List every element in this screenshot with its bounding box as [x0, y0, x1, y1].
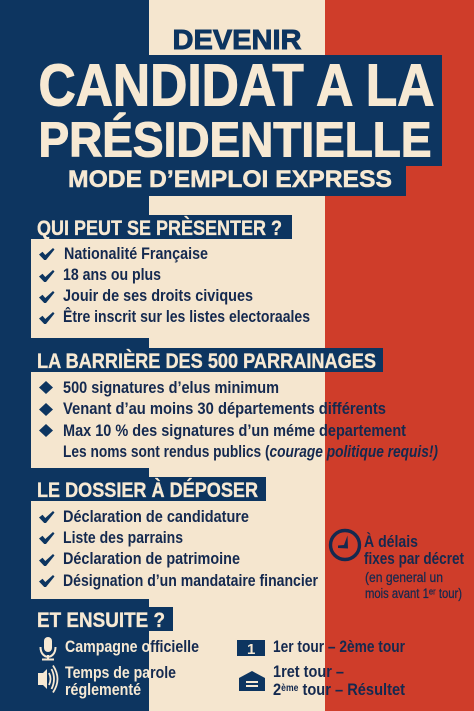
icon: microphone: [40, 637, 56, 660]
panel: le dossier à déposer: [31, 477, 318, 599]
callout: délais: À délais: [364, 532, 418, 551]
title banner: [149, 55, 442, 196]
callout: délais: [330, 530, 464, 601]
title block: [38, 24, 442, 196]
panel: le dossier à déposer: Déclaration de candidature: [63, 507, 249, 526]
icon: ballot box: [239, 671, 265, 691]
panel: barrière des 500 parrainages: Max 10 % des signatures d’un méme departement: [63, 421, 406, 440]
panel: barrière des 500 parrainages: Les noms sont rendus publics (courage politique requis!): [63, 442, 438, 461]
text: tours: 1er tour – 2ème tour: [273, 637, 405, 656]
heading bar: [31, 215, 292, 239]
panel: barrière des 500 parrainages: Venant d’au moins 30 départements différents: [63, 399, 386, 418]
panel: le dossier à déposer: Déclaration de patrimoine: [63, 549, 240, 568]
title: devenir: DEVENIR: [172, 24, 302, 55]
heading bar: [31, 607, 173, 631]
text: résultat: ème: [281, 683, 299, 694]
text: résultat: tour – Résultet: [298, 680, 405, 699]
text: résultat: [273, 662, 405, 699]
text: temps de parole: Temps de parole: [65, 663, 176, 682]
text: résultat: 1ret tour –: [273, 662, 344, 681]
heading: LE DOSSIER À DÉPOSER: [37, 479, 258, 502]
text: résultat: 2: [273, 680, 282, 699]
heading: LA BARRIÈRE DES 500 PARRAINAGES: [37, 350, 376, 373]
icon: speaker: [38, 666, 58, 692]
heading: ET ENSUITE ?: [37, 609, 165, 632]
heading bar: [31, 348, 383, 372]
panel: qui peut se présenter: [31, 215, 310, 338]
panel: qui peut se présenter: Nationalité Française: [64, 244, 208, 263]
list: [39, 381, 53, 437]
heading: QUI PEUT SE PRÈSENTER ?: [37, 217, 282, 240]
panel: qui peut se présenter: 18 ans ou plus: [63, 265, 161, 284]
heading bar: [31, 477, 266, 501]
panel: qui peut se présenter: Être inscrit sur les listes electoraales: [63, 307, 310, 326]
callout: délais: (en general un: [365, 570, 443, 585]
panel: qui peut se présenter: Jouir de ses droits civiques: [63, 286, 253, 305]
icon: tour 1 box: 1: [247, 641, 255, 658]
panel: barrière des 500 parrainages: [31, 348, 438, 468]
title: présidentielle: PRÉSIDENTIELLE: [38, 114, 432, 168]
panel: barrière des 500 parrainages: 500 signatures d’elus minimum: [63, 378, 279, 397]
icon: clock: [330, 530, 360, 560]
icon: tour 1 box: [237, 640, 265, 658]
list: [39, 511, 54, 587]
panel: le dossier à déposer: Désignation d’un mandataire financier: [63, 571, 318, 590]
text: campagne officielle: Campagne officielle: [65, 637, 199, 656]
panel: le dossier à déposer: Liste des parrains: [63, 528, 183, 547]
panel: et ensuite: [31, 607, 405, 699]
list: [39, 248, 54, 324]
subtitle: MODE D’EMPLOI EXPRESS: [68, 166, 392, 193]
text: réglementé: réglementé: [65, 680, 141, 699]
